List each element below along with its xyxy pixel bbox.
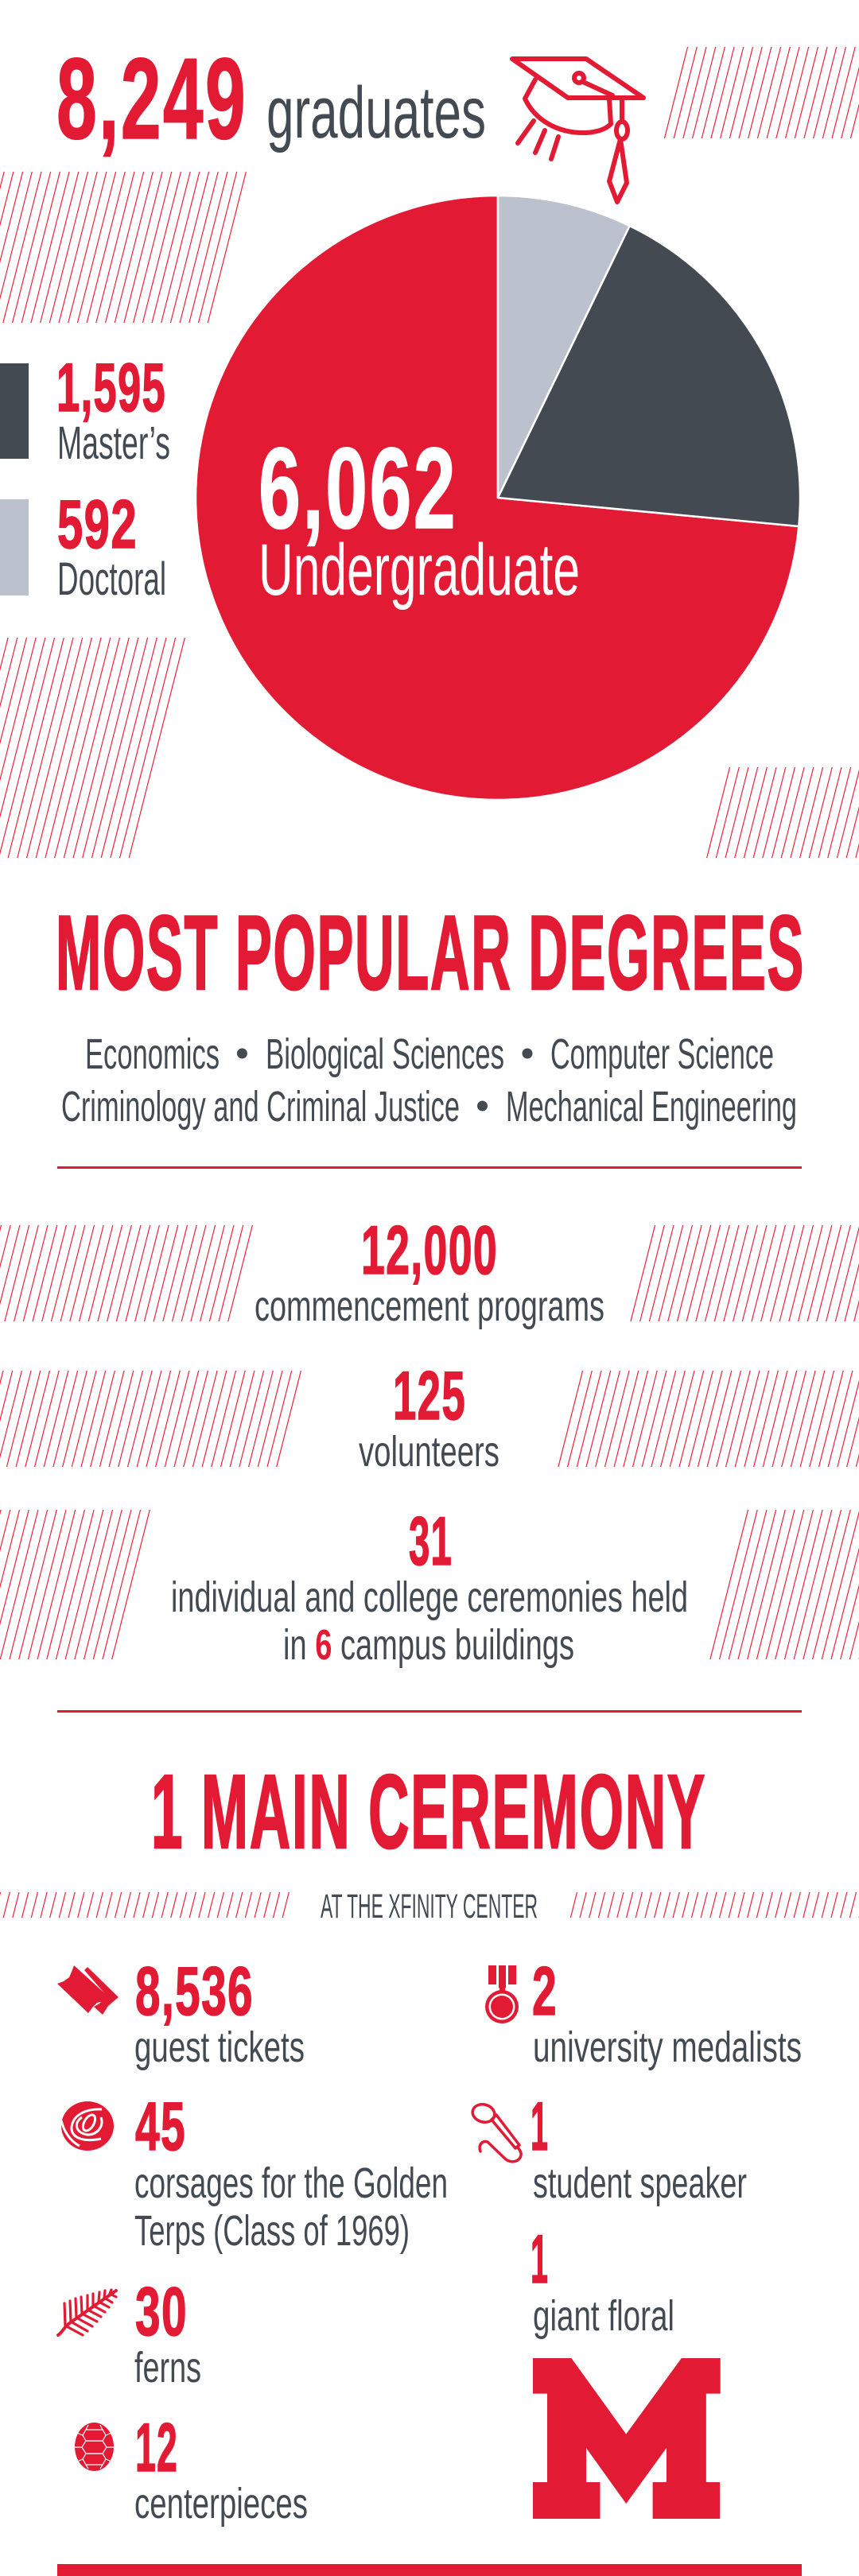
- item: giant floral: [531, 2221, 721, 2519]
- hatch right: [554, 1371, 859, 1467]
- item: student speaker: 1: [531, 2089, 549, 2165]
- label: guest tickets: [134, 2023, 305, 2071]
- icon: ticket: [57, 1965, 119, 2015]
- number: 30: [135, 2274, 188, 2350]
- icon: turtle shell: [75, 2423, 114, 2471]
- doctoral number: 592: [57, 487, 138, 563]
- degree: economics: Economics: [85, 1030, 220, 1078]
- swatch: master's: [0, 363, 29, 459]
- subheading: at the xfinity center: [0, 1887, 859, 1926]
- hatch: top right: [661, 47, 859, 138]
- legend: master's: [0, 350, 170, 469]
- label line 2: Terps (Class of 1969): [134, 2207, 410, 2255]
- pie chart: graduates by degree: [196, 196, 800, 800]
- label line 1: corsages for the Golden: [134, 2159, 448, 2207]
- hatch right: [625, 1225, 859, 1321]
- number: 125: [393, 1358, 466, 1434]
- label line 2: in 6 campus buildings: [283, 1621, 574, 1669]
- hatch: lower right: [698, 767, 859, 858]
- total number: 8,249: [56, 34, 247, 163]
- number: 8,536: [135, 1953, 254, 2030]
- title: total graduates: [56, 34, 486, 163]
- item: ferns: [58, 2274, 201, 2392]
- label: ferns: [134, 2344, 201, 2392]
- legend: doctoral: [0, 487, 166, 605]
- icon: rose: [61, 2101, 114, 2151]
- item: corsages: [61, 2089, 448, 2255]
- bullet: [522, 1048, 533, 1059]
- degree: criminology and criminal justice: Criminology and Criminal Justice: [61, 1083, 460, 1131]
- slice: undergraduate: [196, 196, 799, 800]
- icon: fern: [58, 2290, 116, 2335]
- label: giant floral: [533, 2292, 674, 2340]
- number: 31: [409, 1503, 453, 1580]
- item: centerpieces: [75, 2410, 308, 2528]
- doctoral label: Doctoral: [57, 553, 166, 605]
- hatch left: [0, 1510, 154, 1659]
- undergraduate label: Undergraduate: [258, 530, 580, 611]
- icon: medal: [485, 1965, 519, 2023]
- item: student speaker: [471, 2089, 747, 2207]
- label: commencement programs: [255, 1282, 604, 1330]
- icon: block M: [533, 2358, 721, 2519]
- stat row: commencement programs: [0, 1212, 859, 1330]
- bullet: [237, 1048, 247, 1059]
- bullet: [477, 1100, 488, 1111]
- number: 12: [135, 2410, 178, 2486]
- number: 2: [532, 1953, 558, 2030]
- slice: master's: [498, 226, 800, 526]
- item: guest tickets: [57, 1953, 305, 2071]
- hatch: upper left: [0, 172, 250, 323]
- swatch: doctoral: [0, 499, 29, 596]
- pie label: undergraduate: [258, 424, 580, 611]
- slice: doctoral: [498, 196, 630, 498]
- label: volunteers: [359, 1428, 499, 1476]
- number: 12,000: [361, 1212, 498, 1289]
- item: university medalists: [485, 1953, 802, 2071]
- number: 45: [135, 2089, 186, 2165]
- stat row: ceremonies: [0, 1503, 859, 1669]
- hatch left: [0, 1892, 293, 1918]
- degree list: [61, 1030, 797, 1131]
- label: centerpieces: [134, 2480, 308, 2528]
- label: AT THE XFINITY CENTER: [321, 1887, 538, 1926]
- footer bar: [57, 2564, 802, 2576]
- stat row: volunteers: [0, 1358, 859, 1476]
- hatch right: [566, 1892, 859, 1918]
- hatch right: [705, 1510, 859, 1659]
- icon: graduation cap: [512, 59, 643, 202]
- hatch left: [0, 1225, 256, 1321]
- hatch left: [0, 1371, 305, 1467]
- label: student speaker: [533, 2159, 747, 2207]
- icon: microphone: [471, 2102, 521, 2162]
- total label: graduates: [266, 72, 486, 153]
- item: giant floral: 1: [531, 2221, 549, 2298]
- master's number: 1,595: [56, 350, 166, 426]
- master's label: Master’s: [57, 417, 170, 469]
- hatch: lower left: [0, 638, 189, 858]
- degree: biological sciences: Biological Sciences: [266, 1030, 504, 1078]
- undergraduate number: 6,062: [258, 424, 457, 553]
